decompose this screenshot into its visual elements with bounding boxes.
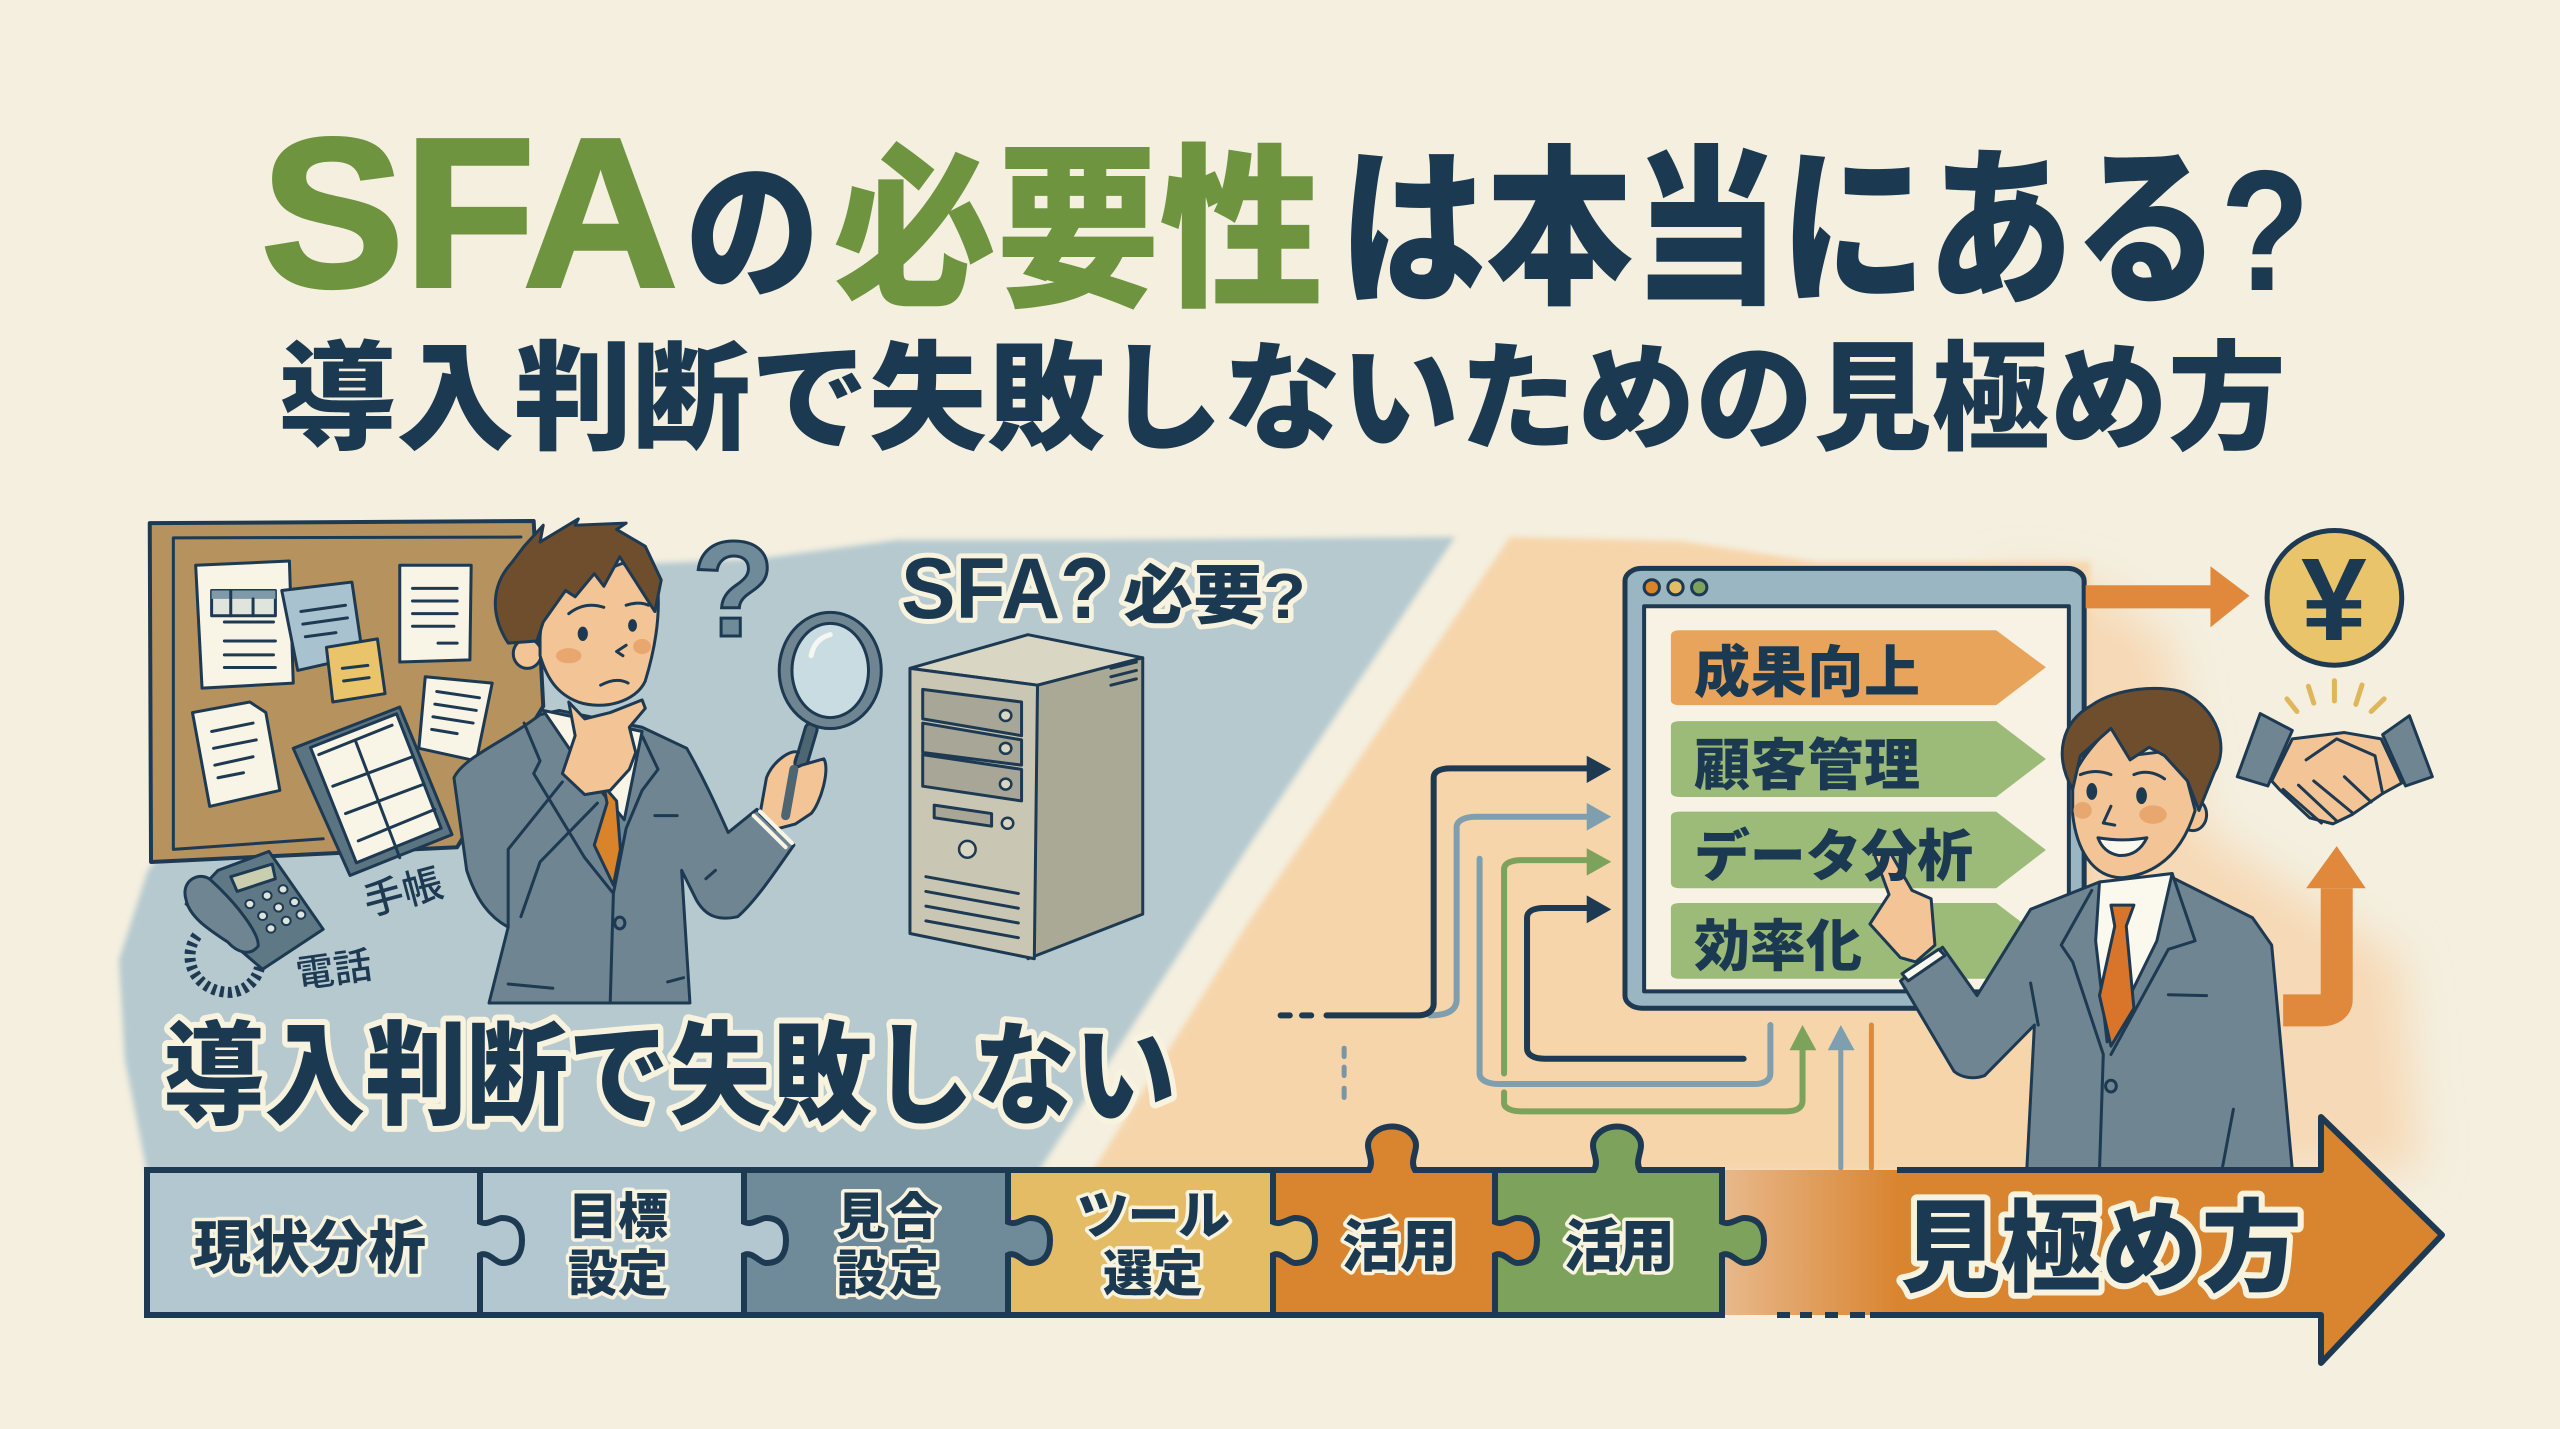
person: smiling businessman	[1870, 688, 2292, 1170]
piece labels: 活用	[1564, 1215, 1675, 1279]
large arrow body	[1722, 1117, 2442, 1363]
blue note	[282, 582, 363, 670]
desk telephone	[185, 851, 323, 992]
tilted memo	[419, 677, 492, 761]
yen coin	[2267, 531, 2402, 665]
piece labels: 活用	[1342, 1215, 1457, 1279]
illustration: left scene	[150, 519, 1143, 1003]
suit lines	[2031, 874, 2233, 1170]
rising arrow head	[2306, 846, 2366, 888]
title line 1	[261, 94, 2310, 331]
panel: peach fade right	[2000, 575, 2419, 1172]
title line 1: 必要性	[833, 134, 1323, 330]
handshake	[2237, 714, 2432, 824]
necktie	[2099, 905, 2134, 1046]
illustration: right scene	[1281, 531, 2432, 1170]
hair	[2062, 688, 2221, 810]
paper with table	[196, 561, 293, 688]
piece: ツール選定	[1008, 1170, 1315, 1315]
piece labels: 現状分析	[193, 1216, 426, 1281]
sticky note	[326, 639, 385, 702]
arrow to yen	[2086, 566, 2249, 627]
label: SFA? 必要?: 必要?	[1123, 560, 1306, 632]
panel: blue problem background	[119, 537, 1455, 1172]
piece: 現状分析	[147, 1170, 522, 1315]
piece labels: 設定	[568, 1246, 668, 1302]
cuff lines	[754, 811, 792, 847]
ear	[513, 639, 541, 668]
cheeks	[556, 639, 651, 663]
title line 2: 導入判断で失敗しないための見極め方	[278, 334, 2286, 466]
label: SFA? 必要?: SFA?	[901, 541, 1110, 637]
piece labels: 設定	[836, 1246, 939, 1302]
heading: 導入判断で失敗しない: 導入判断で失敗しない	[163, 1014, 1176, 1139]
magnifying glass	[779, 612, 881, 816]
piece labels: ツール	[1077, 1188, 1230, 1246]
banner labels: データ分析	[1694, 825, 1973, 888]
banner labels: 顧客管理	[1694, 734, 1920, 797]
banner labels: 効率化	[1694, 915, 1862, 978]
corkboard	[150, 521, 543, 862]
curled paper	[192, 702, 280, 806]
title line 1: の	[685, 149, 820, 319]
puzzle timeline strip	[147, 1117, 2442, 1363]
glass handle end	[786, 769, 794, 816]
necktie	[594, 786, 620, 885]
app window	[1625, 568, 2084, 1008]
banner: green 1	[1671, 721, 2046, 797]
face	[540, 563, 658, 705]
rising arrow	[2283, 888, 2337, 1010]
smile and eyes	[2080, 771, 2165, 856]
notebook 手帳	[293, 707, 452, 875]
memo paper	[400, 565, 471, 662]
suit	[1900, 876, 2292, 1170]
hair	[495, 519, 661, 643]
piece labels	[193, 1188, 1675, 1302]
label: 電話: 電話	[293, 945, 375, 997]
server tower	[910, 635, 1143, 959]
ear	[2179, 799, 2207, 831]
piece labels: 選定	[1103, 1246, 1203, 1302]
shine rays	[2287, 681, 2384, 712]
shirt cuff	[1902, 949, 1945, 981]
cheeks	[2073, 802, 2167, 824]
shirt	[543, 710, 642, 820]
face	[2073, 726, 2195, 878]
hand holding glass	[760, 752, 826, 829]
piece: 目標設定	[480, 1170, 786, 1315]
title line 1: は本当にある?	[1339, 135, 2310, 327]
suit	[454, 710, 794, 1003]
piece: 活用 green	[1495, 1126, 1764, 1315]
person: worried businessman	[454, 519, 881, 1003]
banner labels	[1694, 641, 1973, 978]
piece: 活用 orange	[1273, 1126, 1537, 1315]
piece labels: 目標	[568, 1189, 668, 1245]
banner labels: 成果向上	[1694, 641, 1920, 704]
piece: 見合設定	[744, 1170, 1050, 1315]
piece labels: 見合	[836, 1189, 939, 1245]
arrow label: 見極め方: 見極め方	[1900, 1193, 2302, 1305]
suit lines	[508, 723, 715, 1003]
pointing hand	[1870, 850, 1935, 962]
banner: green 3	[1671, 903, 2046, 979]
banner: green 2	[1671, 812, 2046, 888]
panel: peach solution background	[1092, 537, 2090, 1172]
yen symbol: ¥	[2301, 534, 2367, 666]
banner: orange	[1671, 630, 2046, 705]
flow arrows into window	[1281, 756, 1871, 1168]
label: 手帳: 手帳	[359, 861, 448, 925]
label: SFA? 必要?	[901, 541, 1306, 637]
facial features	[569, 603, 648, 685]
arrow outline	[1777, 1117, 2442, 1363]
hand on chin	[562, 700, 645, 795]
shirt	[2096, 874, 2172, 1042]
question mark: ?	[692, 513, 775, 665]
title line 1: SFA	[261, 94, 678, 331]
